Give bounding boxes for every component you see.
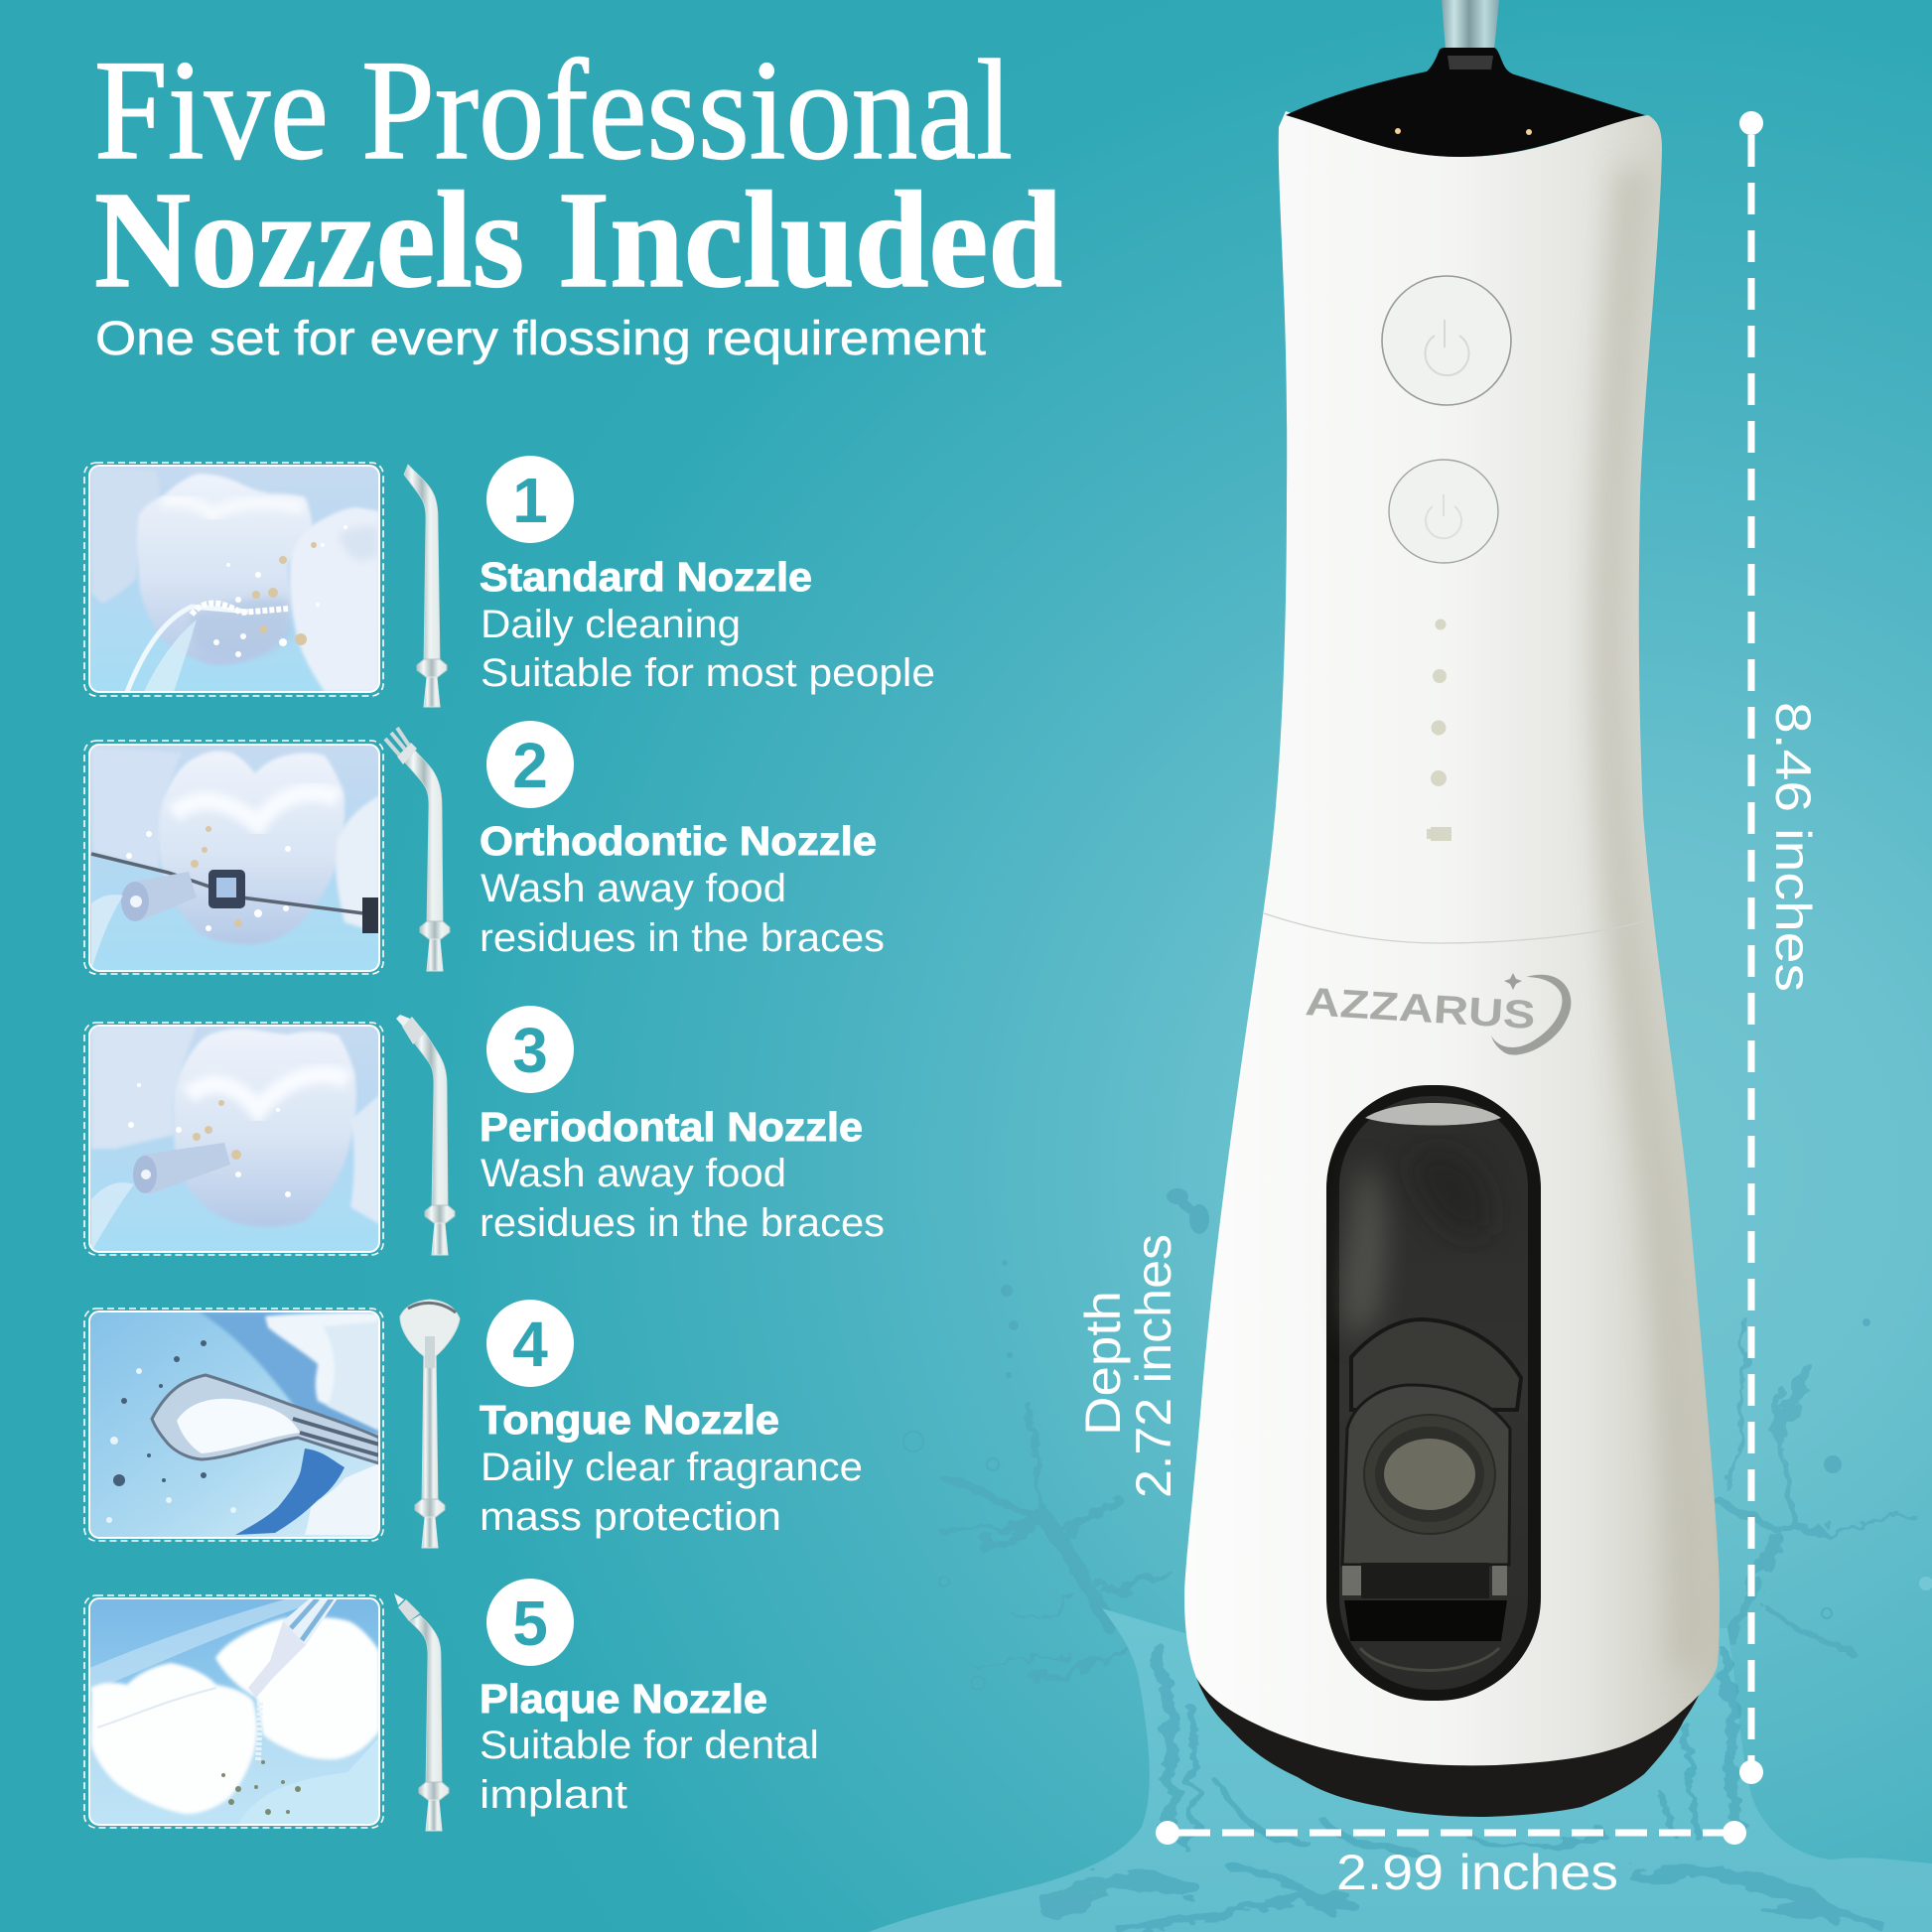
number badge 2: 2: [512, 730, 548, 801]
text: standard nozzle: Daily cleaning: [481, 603, 741, 646]
label: depth 2.72 inches: Depth: [1075, 1291, 1131, 1436]
text: periodontal nozzle: Wash away food: [481, 1152, 786, 1195]
text: tongue nozzle: Tongue Nozzle: [480, 1397, 779, 1443]
AZZARUS logo: AZZARUS: [1304, 980, 1537, 1037]
panel: orthodontic nozzle: [84, 721, 885, 974]
number badge 5: 5: [512, 1587, 548, 1659]
height dimension line: 8.46 inches: [1739, 111, 1763, 1784]
panel: standard nozzle: [84, 456, 935, 707]
number badge 3: 3: [512, 1015, 548, 1086]
text: periodontal nozzle: [480, 1104, 885, 1245]
nozzle 3: periodontal: [396, 1015, 455, 1255]
AZZARUS logo: [1304, 973, 1571, 1055]
text: plaque nozzle: Suitable for dental: [480, 1724, 819, 1767]
nozzle 2: orthodontic with brush tip: [385, 728, 450, 971]
dashed frame and photo: water jet between teeth: [84, 463, 383, 696]
panel: tongue nozzle: [84, 1300, 863, 1548]
water tank window: [1326, 1085, 1541, 1701]
panel: periodontal nozzle: [84, 1006, 885, 1255]
dashed frame and photo: plaque removal: [84, 1595, 383, 1828]
text: plaque nozzle: implant: [480, 1773, 627, 1817]
water splash behind device: [869, 1188, 1932, 1932]
black top cap with LEDs: [1286, 48, 1645, 157]
number badge 4: 4: [512, 1309, 548, 1380]
dashed frame and photo: tongue cleaning: [84, 1309, 383, 1541]
black base: [1196, 1668, 1711, 1817]
nozzle 4: tongue scraper: [400, 1300, 460, 1548]
text: tongue nozzle: mass protection: [480, 1495, 781, 1539]
number badge 2: [486, 721, 574, 808]
text: plaque nozzle: Plaque Nozzle: [480, 1676, 767, 1722]
text: orthodontic nozzle: [480, 818, 885, 960]
label: depth 2.72 inches: 2.72 inches: [1126, 1234, 1181, 1498]
title: [94, 32, 1062, 317]
number badge 4: [486, 1300, 574, 1387]
mode button: [1389, 460, 1498, 563]
label: depth 2.72 inches: [1075, 1234, 1181, 1498]
clear nozzle tube: [1442, 0, 1499, 50]
title: Nozzels Included: [94, 164, 1062, 317]
panel: plaque nozzle: [84, 1579, 819, 1831]
number badge 1: 1: [512, 465, 548, 536]
text: periodontal nozzle: residues in the braces: [480, 1201, 885, 1245]
number badge 5: [486, 1579, 574, 1666]
width dimension line: 2.99 inches: [1156, 1821, 1746, 1845]
text: standard nozzle: Standard Nozzle: [480, 554, 812, 600]
text: plaque nozzle: [480, 1676, 819, 1817]
subtitle: One set for every flossing requirement: [95, 313, 986, 365]
number badge 1: [486, 456, 574, 543]
text: tongue nozzle: [480, 1397, 863, 1539]
text: orthodontic nozzle: residues in the braces: [480, 916, 885, 960]
text: orthodontic nozzle: Orthodontic Nozzle: [480, 818, 877, 864]
text: standard nozzle: Suitable for most people: [481, 651, 935, 695]
dashed frame and photo: periodontal tip at tooth: [84, 1023, 383, 1255]
text: standard nozzle: [480, 554, 935, 695]
label: 2.99 inches: 2.99 inches: [1336, 1845, 1618, 1900]
product: water flosser: [1172, 0, 1727, 1817]
text: periodontal nozzle: Periodontal Nozzle: [480, 1104, 863, 1150]
nozzle 1: standard: [404, 465, 447, 707]
white body: [1172, 99, 1727, 1777]
label: 8.46 inches: 8.46 inches: [1765, 702, 1821, 992]
text: tongue nozzle: Daily clear fragrance: [481, 1446, 863, 1489]
dashed frame and photo: braces: [84, 741, 383, 974]
number badge 3: [486, 1006, 574, 1093]
power button: [1382, 276, 1511, 405]
text: orthodontic nozzle: Wash away food: [481, 867, 786, 910]
indicator lights: [1427, 620, 1451, 841]
nozzle 5: plaque: [394, 1593, 449, 1831]
title: Five Professional: [94, 32, 1013, 190]
